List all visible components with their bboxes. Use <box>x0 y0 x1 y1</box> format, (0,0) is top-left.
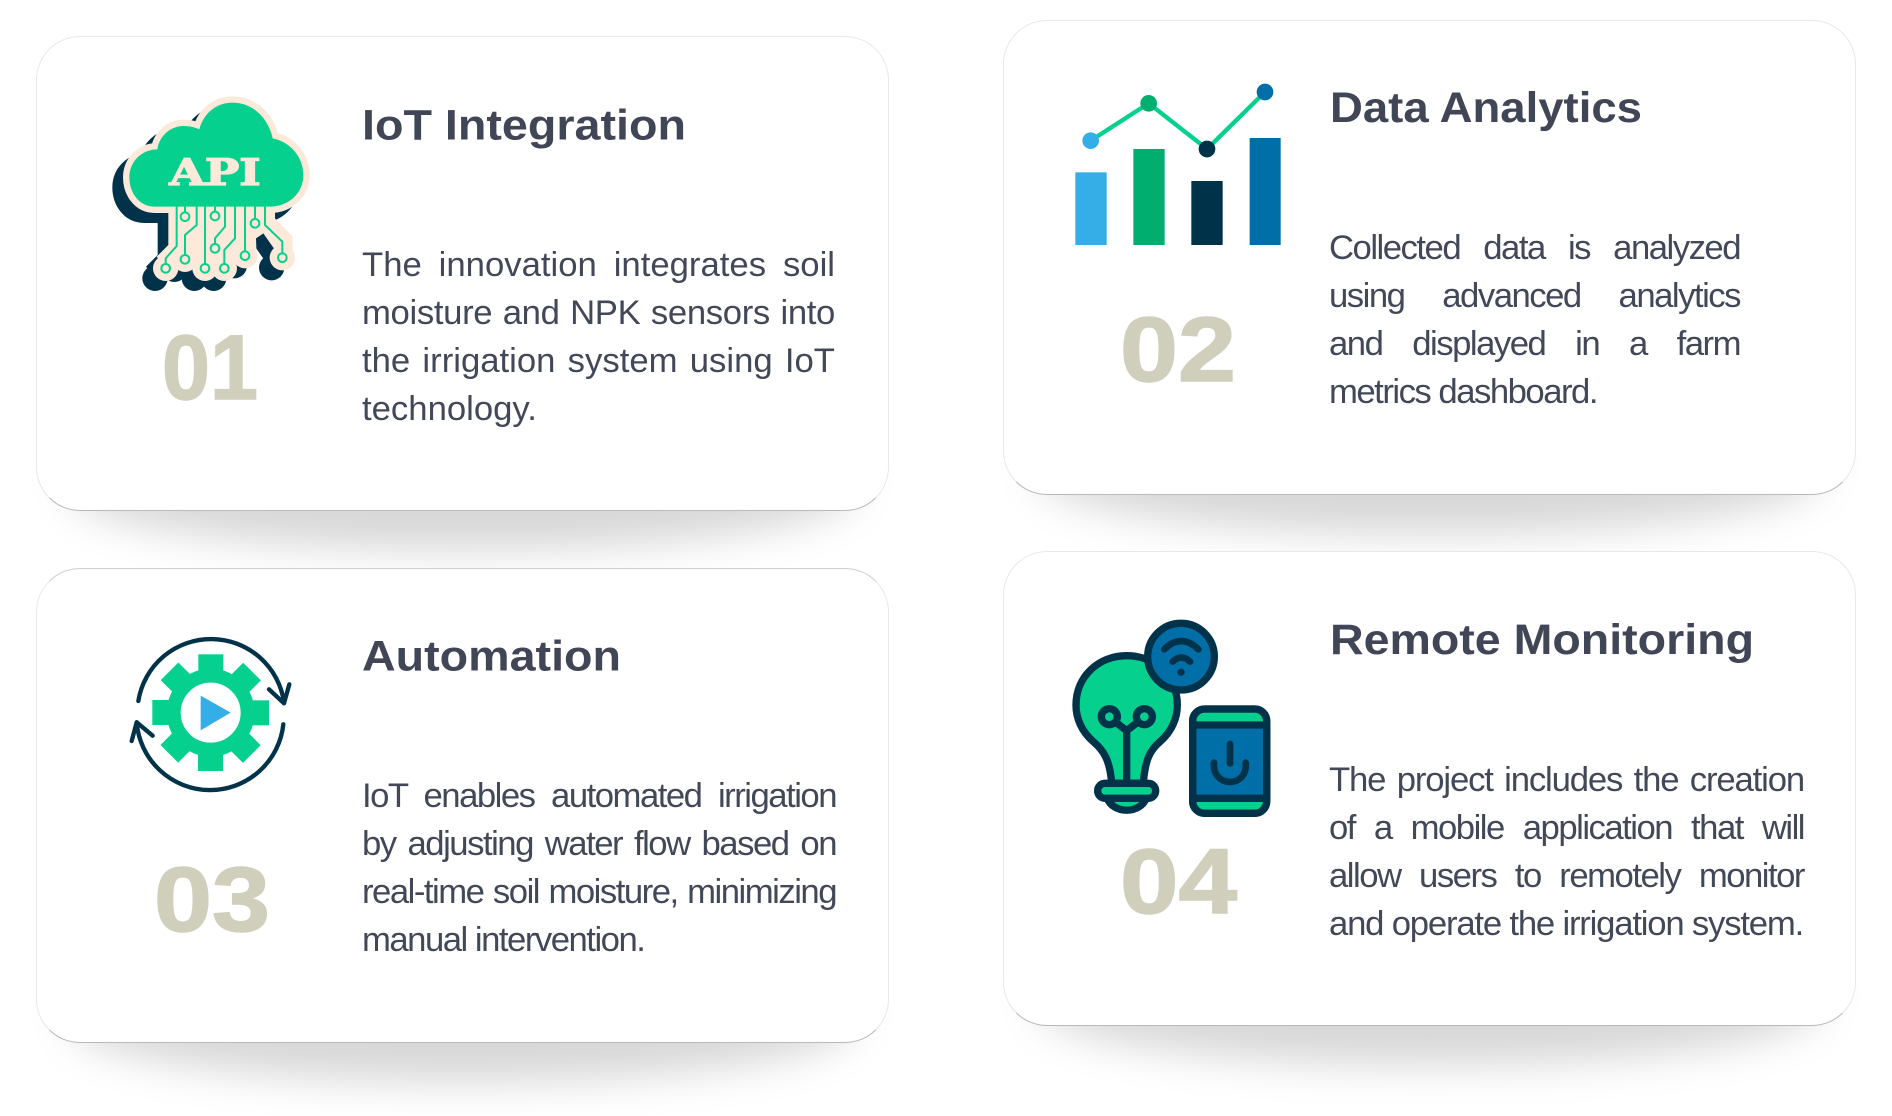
icon: API cloud with circuit traces <box>112 96 310 291</box>
icon: API cloud with circuit traces: API <box>168 151 261 194</box>
text block: and displayed in a farm <box>1329 325 1740 363</box>
text block: by adjusting water flow based on <box>362 825 836 863</box>
text block: technology. <box>362 390 537 428</box>
number 01: 01 <box>162 317 258 419</box>
icon: bar and line chart <box>1075 84 1281 245</box>
text block: manual intervention. <box>362 921 644 959</box>
text block: the irrigation system using IoT <box>362 342 835 380</box>
number 02: 02 <box>1120 299 1236 401</box>
text block: allow users to remotely monitor <box>1329 857 1804 895</box>
heading: IoT Integration <box>362 102 686 150</box>
text block: moisture and NPK sensors into <box>362 294 835 332</box>
number 03: 03 <box>154 849 270 951</box>
panel: Remote Monitoring <box>1003 551 1856 1080</box>
text block: The innovation integrates soil <box>362 246 835 284</box>
heading: Data Analytics <box>1330 84 1642 132</box>
icon: gear with play button and cycle arrows <box>130 636 292 792</box>
text block <box>1329 761 1805 943</box>
text block: IoT enables automated irrigation <box>362 777 836 815</box>
icon: smart bulb, wifi and phone <box>1072 620 1270 817</box>
text block: The project includes the creation <box>1329 761 1804 799</box>
text block <box>362 246 835 428</box>
panel: IoT Integration <box>36 36 889 566</box>
text block: Collected data is analyzed <box>1329 229 1740 267</box>
text block: and operate the irrigation system. <box>1329 905 1803 943</box>
heading: Remote Monitoring <box>1330 616 1754 664</box>
text block: of a mobile application that will <box>1329 809 1804 847</box>
heading: Automation <box>362 632 621 680</box>
text block: real-time soil moisture, minimizing <box>362 873 836 911</box>
panel: Automation <box>36 568 889 1098</box>
text block <box>1329 229 1740 411</box>
panel: Data Analytics <box>1003 20 1856 550</box>
text block: using advanced analytics <box>1329 277 1740 315</box>
number 04: 04 <box>1120 831 1237 933</box>
text block <box>362 777 836 959</box>
text block: metrics dashboard. <box>1329 373 1597 411</box>
